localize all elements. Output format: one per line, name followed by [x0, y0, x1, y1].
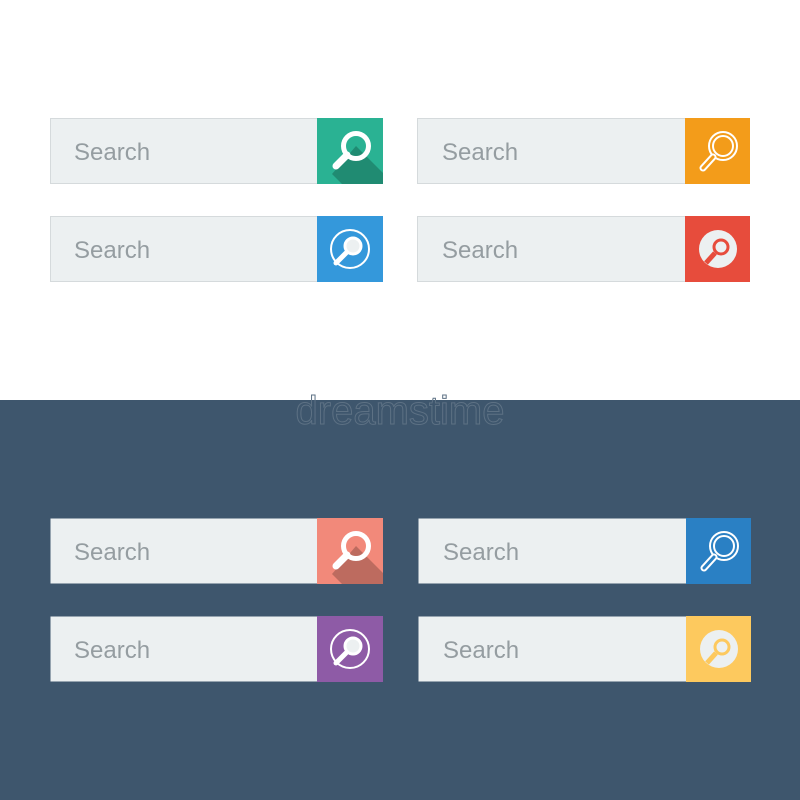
search bar: salmon	[50, 518, 383, 584]
search bar: yellow	[418, 616, 751, 682]
search bar: blue outline: Search	[443, 539, 519, 566]
icon: red filled circle magnifier	[685, 216, 750, 282]
search bar: red: Search	[442, 237, 518, 264]
search bar: blue ring	[50, 216, 383, 282]
background bottom	[0, 400, 800, 800]
icon: yellow filled circle magnifier	[686, 616, 751, 682]
icon: blue outline magnifier	[686, 518, 751, 584]
search bar: blue ring: Search	[74, 237, 150, 264]
search bar: yellow: Search	[443, 637, 519, 664]
search bar: salmon: Search	[74, 539, 150, 566]
icon: salmon magnifier	[317, 518, 383, 584]
search bar: orange: Search	[442, 139, 518, 166]
search bar: blue outline	[418, 518, 751, 584]
search bar: red	[418, 216, 750, 282]
icon: orange outline magnifier	[685, 118, 750, 184]
watermark: dreamstime	[296, 389, 504, 433]
icon: teal magnifier	[317, 118, 383, 184]
background top	[0, 0, 800, 400]
search bar: teal: Search	[74, 139, 150, 166]
search bar: purple: Search	[74, 637, 150, 664]
icon: blue ring magnifier	[317, 216, 383, 282]
icon: purple ring magnifier	[317, 616, 383, 682]
search bar: purple	[50, 616, 383, 682]
search bar: teal	[50, 118, 383, 184]
search bar: orange	[418, 118, 750, 184]
